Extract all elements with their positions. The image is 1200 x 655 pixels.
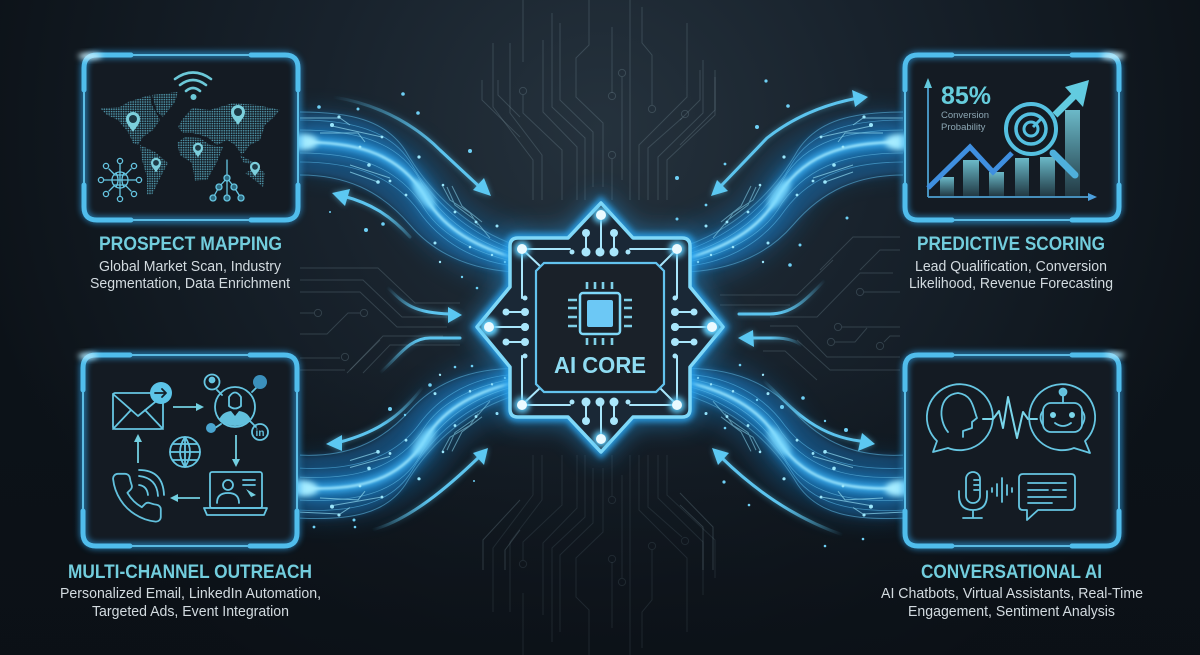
icon: envelope with arrow badge bbox=[113, 382, 172, 429]
core wide halo bbox=[477, 203, 723, 452]
icon: dotted world map bbox=[100, 92, 280, 195]
description: predictive scoring: Likelihood, Revenue Forecasting bbox=[909, 275, 1113, 292]
icon: phone bbox=[113, 470, 164, 522]
arrow: phone to envelope bbox=[134, 434, 142, 463]
data stream: bottom right bbox=[688, 357, 917, 528]
panel: predictive scoring bbox=[905, 53, 1125, 292]
corner flare bbox=[78, 53, 102, 59]
panel frame bbox=[905, 355, 1119, 546]
description: predictive scoring bbox=[909, 258, 1113, 292]
heading: prospect mapping: PROSPECT MAPPING bbox=[99, 233, 282, 255]
heading: multi-channel outreach: MULTI-CHANNEL OUTREACH bbox=[68, 561, 312, 583]
stat: 85% conversion probability: 85% bbox=[941, 82, 991, 110]
trend line bbox=[928, 147, 1012, 188]
core circuit traces bbox=[481, 207, 720, 447]
description: predictive scoring: Lead Qualification, Conversion bbox=[915, 258, 1107, 275]
data stream: bottom left bbox=[286, 357, 515, 528]
stat: 85% conversion probability: Conversion bbox=[941, 110, 989, 121]
icon: laptop bbox=[204, 472, 267, 515]
icon: processor chip bbox=[568, 282, 632, 345]
icon: audio bars bbox=[992, 478, 1012, 502]
icon: map pins bbox=[126, 105, 260, 176]
description: prospect mapping: Global Market Scan, Industry bbox=[99, 258, 281, 275]
description: conversational ai bbox=[881, 585, 1143, 620]
icon: robot speech bubble bbox=[1029, 384, 1095, 453]
arrow: envelope to contact bbox=[173, 403, 204, 411]
icon: globe bbox=[170, 437, 200, 467]
panel: conversational ai bbox=[881, 352, 1143, 620]
icon: contact network: in bbox=[256, 428, 264, 439]
data stream: top left bbox=[286, 112, 515, 272]
central ai core chip bbox=[477, 203, 723, 452]
icon: contact network bbox=[204, 374, 268, 440]
arrow: laptop to phone bbox=[170, 494, 200, 502]
icon: magnifier with target bbox=[1006, 104, 1075, 175]
description: prospect mapping: Segmentation, Data Enrichment bbox=[90, 275, 291, 292]
description: prospect mapping bbox=[90, 258, 291, 292]
title: ai core: AI CORE bbox=[554, 352, 646, 378]
data stream: top right bbox=[688, 112, 917, 272]
panel: multi-channel outreach bbox=[60, 353, 321, 620]
description: multi-channel outreach bbox=[60, 585, 321, 620]
panel: prospect mapping bbox=[78, 53, 298, 292]
icon: human speech bubble bbox=[927, 384, 993, 452]
arrow glow bbox=[326, 90, 875, 535]
icon: waveform bbox=[983, 397, 1037, 438]
icon: microphone bbox=[959, 472, 987, 518]
arrow: contact to laptop bbox=[232, 435, 240, 467]
corner flare bbox=[1105, 352, 1125, 358]
inner square bbox=[536, 263, 664, 392]
panel frame bbox=[905, 55, 1119, 220]
core outline bbox=[477, 203, 723, 452]
icon: growth arrow bbox=[1055, 80, 1089, 115]
icon: message bubble bbox=[1019, 474, 1075, 520]
chart axes bbox=[924, 78, 1097, 201]
description: conversational ai: AI Chatbots, Virtual Assistants, Real-Time bbox=[881, 585, 1143, 602]
panel frame bbox=[84, 55, 298, 220]
arrows between panels and core bbox=[326, 90, 875, 535]
circuit traces: background bbox=[300, 0, 900, 655]
icon: hierarchy tree bbox=[210, 160, 244, 201]
panel frame bbox=[83, 355, 297, 546]
core outer glow bbox=[477, 203, 723, 452]
stat: 85% conversion probability bbox=[941, 82, 991, 133]
description: conversational ai: Engagement, Sentiment Analysis bbox=[908, 603, 1115, 620]
corner flare bbox=[1101, 53, 1125, 59]
stat: 85% conversion probability: Probability bbox=[941, 122, 986, 133]
heading: predictive scoring: PREDICTIVE SCORING bbox=[917, 233, 1105, 255]
description: multi-channel outreach: Targeted Ads, Event Integration bbox=[92, 603, 289, 620]
floating particles bbox=[313, 79, 864, 547]
icon: network globe bbox=[98, 158, 142, 202]
bar chart bbox=[940, 110, 1080, 196]
corner flare bbox=[78, 353, 98, 359]
description: multi-channel outreach: Personalized Email, LinkedIn Automation, bbox=[60, 585, 321, 602]
heading: conversational ai: CONVERSATIONAL AI bbox=[921, 561, 1102, 583]
icon: wifi bbox=[175, 72, 211, 100]
